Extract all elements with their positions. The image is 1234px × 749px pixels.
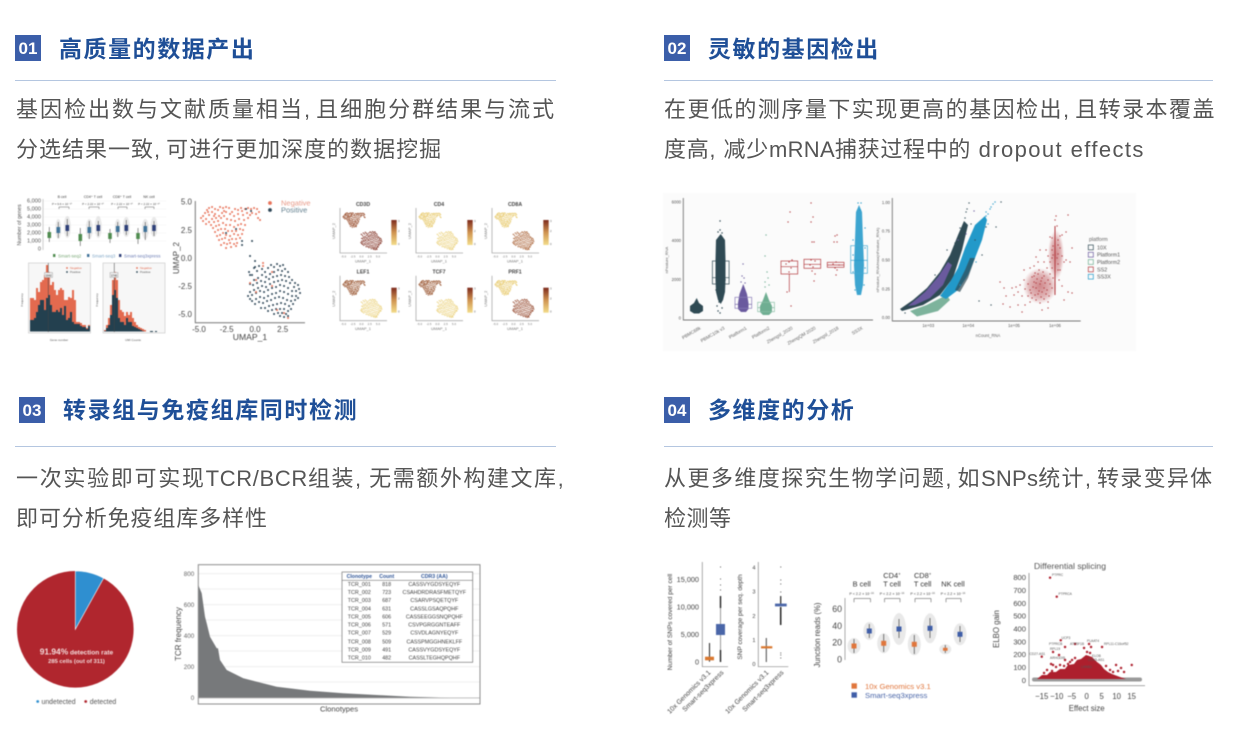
volcano plot: differential splicing: PTPRCB — [1049, 642, 1063, 646]
feature plot: CD8A: UMAP_1 — [507, 258, 524, 264]
chart group 02 — [664, 197, 1121, 346]
clonotype table: CSVPGRGGNTEAFF — [408, 623, 461, 629]
divider 01 — [15, 80, 556, 81]
clonotype table: TCR_010 — [348, 655, 371, 661]
histogram: UMI counts — [95, 263, 165, 342]
volcano plot: differential splicing: ARHGDIB — [1050, 656, 1066, 660]
pie chart: detection rate: 285 cells (out of 311) — [48, 659, 105, 665]
scatter plot: nCount vs nFeature: 0.25 — [882, 286, 891, 292]
feature plot: CD8A: -5.0 -2.5 0.0 2.5 5.0 — [493, 254, 532, 258]
box and strip plot: nFeature by dataset: nFeature_RNA — [664, 246, 669, 273]
box plot: number of genes: 5,000 — [27, 207, 41, 213]
scatter plot: nCount vs nFeature: 1e+04 — [962, 323, 975, 328]
feature plot: LEF1: UMAP_2 — [331, 290, 336, 307]
clonotype table: TCR_004 — [348, 606, 371, 612]
volcano plot: differential splicing: 0 — [1022, 676, 1026, 685]
clonotype table: 687 — [382, 598, 391, 604]
volcano plot: differential splicing — [992, 561, 1145, 713]
feature plot: LEF1: UMAP_1 — [355, 326, 372, 331]
badge 04: 04 — [668, 401, 686, 420]
box plot: SNP coverage per depth: 2 — [752, 614, 756, 620]
UMAP scatter: negative and positive — [172, 198, 311, 342]
dot plot: junction reads: P < 2.2 × 10⁻¹⁶ — [880, 592, 905, 596]
histogram: gene number: Gene number — [50, 338, 68, 342]
feature plot: TCF7 — [407, 270, 476, 331]
clonotype table: CASSVYGDSYEQYF — [408, 647, 461, 653]
bar chart: TCR frequency by clonotype: 400 — [184, 633, 195, 640]
box plot: number of genes: Number of genes — [17, 204, 23, 246]
scatter plot: nCount vs nFeature: 0.50 — [882, 258, 891, 262]
text block 02: 在更低的测序量下实现更高的基因检出,且转录本覆盖 — [664, 97, 1216, 122]
feature plot: PRF1: PRF1 — [508, 270, 522, 276]
box plot: SNPs per cell: 10x Genomics v3.1 — [666, 669, 713, 716]
clonotype table: TCR_002 — [348, 590, 371, 596]
histogram: UMI counts: Frequency — [95, 293, 99, 307]
histogram: gene number: Frequency — [20, 293, 24, 307]
volcano plot: differential splicing: RPL19 — [1050, 647, 1060, 651]
volcano plot: differential splicing: 5 — [1100, 692, 1105, 701]
text block 03: 一次实验即可实现TCR/BCR组装,无需额外构建文库, — [16, 466, 565, 491]
dot plot: junction reads: Junction reads (%) — [813, 602, 822, 668]
box and strip plot: nFeature by dataset: SS3X — [851, 326, 864, 336]
pie chart: detection rate: detected — [90, 699, 116, 706]
box and strip plot: nFeature by dataset: Zhengsl_2018 — [812, 325, 840, 344]
UMAP scatter: negative and positive: Negative — [281, 199, 311, 208]
volcano plot: differential splicing: 300 — [1013, 638, 1026, 646]
text block 01: 基因检出数与文献质量相当,且细胞分群结果与流式 — [16, 97, 556, 122]
box and strip plot: nFeature by dataset: PBMC10k v3 — [700, 325, 726, 343]
box and strip plot: nFeature by dataset: 6000 — [672, 200, 682, 204]
feature plot: PRF1 — [483, 270, 552, 331]
box and strip plot: nFeature by dataset: Platform1 — [728, 325, 748, 340]
box and strip plot: nFeature by dataset: 2000 — [672, 277, 682, 282]
bar chart: TCR frequency by clonotype: TCR frequency — [174, 607, 183, 661]
UMAP scatter: negative and positive: 0.0 — [249, 325, 261, 334]
chart group 03 — [16, 564, 482, 714]
box plot: number of genes: 1,000 — [27, 238, 41, 244]
UMAP scatter: negative and positive: -2.5 — [220, 325, 234, 334]
clonotype table: CASSLGSAQPQHF — [410, 606, 459, 612]
feature plot: CD8A: CD8A — [508, 202, 522, 208]
histogram: UMI counts: UMI Counts — [125, 338, 141, 342]
clonotype table: 818 — [382, 582, 391, 588]
scatter plot: nCount vs nFeature: nCount_RNA — [976, 333, 1001, 338]
dot plot: junction reads: Smart-seq3xpress — [865, 691, 928, 700]
dot plot: junction reads: P < 2.2 × 10⁻¹⁶ — [910, 592, 936, 596]
volcano plot: differential splicing: 600 — [1013, 599, 1026, 608]
feature plot: CD4: 0 — [474, 242, 476, 246]
box and strip plot: nFeature by dataset: Platform2 — [751, 325, 771, 340]
box plot: number of genes: Smart-seq2 — [58, 254, 82, 258]
dot plot: junction reads: + — [898, 572, 901, 576]
text block 04 — [664, 466, 1213, 531]
histogram: gene number: Negative — [70, 266, 82, 270]
volcano plot: differential splicing: RPL11-C16orf52 — [1104, 642, 1129, 646]
UMAP scatter: negative and positive: 2.5 — [277, 325, 289, 334]
feature plot: PRF1: -5.0 -2.5 0.0 2.5 5.0 — [493, 322, 532, 326]
text block 04: 检测等 — [664, 506, 732, 531]
feature plot: LEF1: 3 — [398, 287, 400, 291]
box plot: SNPs per cell — [666, 562, 728, 716]
box plot: number of genes: P < 2.22 × 10⁻¹⁶ — [82, 202, 105, 206]
volcano plot: differential splicing: 0 — [1085, 692, 1090, 701]
divider 02 — [664, 80, 1213, 81]
clonotype table: 631 — [382, 606, 391, 612]
clonotype table: CSAHDRDRASFMETQYF — [403, 590, 467, 596]
box and strip plot: nFeature by dataset: PBMC68k — [681, 325, 702, 340]
feature plot: CD4: CD4 — [434, 202, 444, 208]
box plot: number of genes: CD4⁺ T cell — [84, 195, 102, 199]
box plot: SNPs per cell: 15,000 — [677, 575, 699, 584]
feature plot: CD3D — [331, 202, 400, 264]
box plot: SNP coverage per depth: Smart-seq3xpress — [741, 669, 786, 713]
UMAP scatter: negative and positive: Positive — [281, 206, 307, 215]
feature plot: CD4: 2 — [474, 229, 476, 233]
dot plot: junction reads: 10x Genomics v3.1 — [865, 682, 931, 691]
panel: sensitive gene detection — [664, 35, 1216, 346]
dot plot: junction reads: + — [929, 572, 932, 576]
dot plot: junction reads: T cell — [883, 580, 901, 588]
feature plot: PRF1: UMAP_2 — [483, 290, 488, 307]
bar chart: TCR frequency by clonotype: 600 — [184, 602, 195, 609]
feature plot: CD3D: CD3D — [356, 202, 370, 208]
clonotype table: TCR_007 — [348, 631, 371, 637]
chart group 04 — [666, 561, 1146, 716]
clonotype table: Clonotype — [347, 574, 372, 580]
box plot: SNPs per cell: 0 — [695, 657, 699, 666]
feature plot: CD3D: 3 — [398, 219, 400, 223]
box plot: number of genes — [17, 195, 166, 258]
clonotype table: CSARVPSQETQYF — [410, 598, 459, 604]
bar chart: TCR frequency by clonotype — [174, 565, 480, 714]
histogram: gene number: 1942 — [45, 273, 52, 277]
volcano plot: differential splicing: 700 — [1013, 586, 1026, 595]
text block 04: 从更多维度探究生物学问题,如SNPs统计,转录变异体 — [664, 466, 1213, 491]
box plot: number of genes: 3,000 — [27, 222, 41, 228]
UMAP scatter: negative and positive: -5.0 — [178, 310, 193, 319]
clonotype table: TCR_008 — [348, 639, 371, 645]
volcano plot: differential splicing: −15 — [1035, 692, 1049, 701]
scatter plot: nCount vs nFeature — [875, 198, 1120, 338]
box plot: SNP coverage per depth: 0 — [752, 662, 756, 668]
clonotype table: CASSEEGGSNQPQHF — [406, 614, 463, 620]
volcano plot: differential splicing: ELBO gain — [992, 610, 1001, 648]
bar chart: TCR frequency by clonotype: 800 — [184, 571, 195, 578]
badge 01 — [15, 35, 41, 61]
badge 02 — [664, 35, 690, 61]
panel: high quality data — [15, 35, 556, 342]
scatter plot: nCount vs nFeature: 10X — [1097, 245, 1107, 251]
feature plot: TCF7: 3 — [474, 287, 476, 291]
UMAP scatter: negative and positive: 5.0 — [181, 198, 193, 206]
scatter plot: nCount vs nFeature: SS3X — [1097, 275, 1111, 281]
box and strip plot: nFeature by dataset: Zhengsl_2020 — [766, 325, 794, 344]
box plot: number of genes: P < 2.22 × 10⁻¹⁶ — [138, 202, 161, 206]
bar chart: TCR frequency by clonotype: Clonotypes — [320, 704, 358, 714]
dot plot: junction reads — [813, 571, 966, 700]
box and strip plot: nFeature by dataset: 0 — [679, 316, 682, 320]
clonotype table: TCR_006 — [348, 623, 371, 629]
feature plot: TCF7: UMAP_1 — [431, 326, 448, 331]
feature plot: PRF1: 2 — [550, 297, 552, 301]
feature plot: LEF1: LEF1 — [357, 270, 369, 276]
badge 04 — [664, 397, 690, 423]
volcano plot: differential splicing: 10 — [1112, 692, 1122, 701]
UMAP scatter: negative and positive: 0.0 — [181, 254, 193, 263]
box plot: SNPs per cell: 5,000 — [681, 630, 699, 639]
heading 04: 多维度的分析 — [708, 397, 855, 423]
UMAP scatter: negative and positive: -5.0 — [192, 325, 206, 334]
clonotype table: 529 — [382, 631, 391, 637]
histogram: UMI counts: Positive — [140, 270, 151, 274]
box plot: SNP coverage per depth: SNP coverage per seq. depth — [737, 574, 744, 660]
feature plot: TCF7: -5.0 -2.5 0.0 2.5 5.0 — [417, 322, 456, 326]
panel: transcriptome and immune repertoire — [15, 397, 565, 714]
volcano plot: differential splicing: PTPRCA — [1058, 592, 1073, 596]
histogram: gene number — [20, 263, 90, 342]
box and strip plot: nFeature by dataset: ZhengQM 2020 — [786, 325, 817, 346]
box plot: number of genes: 4,000 — [27, 214, 41, 220]
feature plot: LEF1: 2 — [398, 297, 400, 301]
clonotype table: CASSLTEGHQPQHF — [409, 655, 461, 661]
clonotype table: CSVDLAGNYEQYF — [410, 631, 459, 637]
clonotype table: CASSPMGGHNEKLFF — [406, 639, 463, 645]
feature plot: PRF1: UMAP_1 — [507, 326, 524, 331]
dot plot: junction reads: NK cell — [941, 580, 965, 588]
clonotype table: CDR3 (AA) — [421, 574, 448, 580]
box plot: number of genes: Smart-seq3xpress — [124, 254, 161, 258]
panel: multidimensional analysis — [664, 397, 1213, 716]
divider 03 — [15, 446, 556, 447]
feature plot: CD8A: 2 — [550, 229, 552, 233]
box and strip plot: nFeature by dataset — [664, 198, 873, 346]
badge 03: 03 — [23, 401, 41, 420]
feature plot: LEF1: 0 — [398, 310, 400, 314]
box plot: SNP coverage per depth — [724, 562, 788, 716]
feature plot: CD4 — [407, 202, 476, 264]
box plot: number of genes: Smart-seq3 — [92, 254, 116, 258]
dot plot: junction reads: 40 — [832, 621, 842, 631]
histogram: UMI counts: 1740 — [111, 273, 118, 277]
box plot: number of genes: 2,000 — [27, 230, 41, 236]
clonotype table: 723 — [382, 590, 391, 596]
volcano plot: differential splicing: −10 — [1050, 692, 1064, 701]
UMAP scatter: negative and positive: UMAP_1 — [233, 332, 267, 342]
scatter plot: nCount vs nFeature: 1e+06 — [1049, 323, 1062, 328]
dot plot: junction reads: 20 — [832, 638, 842, 648]
volcano plot: differential splicing: −5 — [1067, 692, 1077, 701]
volcano plot: differential splicing: 200 — [1013, 650, 1026, 659]
histogram: gene number: Positive — [70, 270, 81, 274]
box plot: SNP coverage per depth: 1 — [752, 638, 756, 644]
feature plot: TCF7: UMAP_2 — [407, 290, 412, 307]
feature plot: CD8A: 3 — [550, 219, 552, 223]
feature plot: PRF1: 3 — [550, 287, 552, 291]
clonotype table: CASSVYGDSYEQYF — [408, 582, 461, 588]
clonotype table: 491 — [382, 647, 391, 653]
dot plot: junction reads: CD8 — [914, 571, 929, 580]
text block 01 — [16, 97, 556, 162]
box plot: number of genes: P < 2.22 × 10⁻¹⁶ — [111, 202, 134, 206]
clonotype table: TCR_005 — [348, 614, 371, 620]
scatter plot: nCount vs nFeature: SS2 — [1097, 267, 1107, 273]
feature plot: CD8A: 0 — [550, 242, 552, 246]
dot plot: junction reads: 60 — [832, 604, 842, 614]
feature plot: CD8A — [483, 202, 552, 264]
volcano plot: differential splicing: Differential splicing — [1034, 561, 1106, 571]
scatter plot: nCount vs nFeature: platform — [1089, 237, 1108, 243]
clonotype table: 606 — [382, 614, 391, 620]
volcano plot: differential splicing: 800 — [1013, 573, 1026, 582]
histogram: UMI counts: Negative — [140, 266, 152, 270]
box plot: SNPs per cell: 10,000 — [677, 602, 699, 612]
badge 03 — [19, 397, 45, 423]
badge 02: 02 — [668, 39, 686, 58]
feature plot: CD4: UMAP_2 — [407, 222, 412, 239]
dot plot: junction reads: 0 — [837, 655, 842, 665]
feature plot: CD4: -5.0 -2.5 0.0 2.5 5.0 — [417, 254, 456, 258]
box plot: SNP coverage per depth: 10x Genomics v3.1 — [724, 669, 771, 716]
UMAP scatter: negative and positive: UMAP_2 — [172, 241, 181, 274]
feature plot: CD4: 3 — [474, 219, 476, 223]
pie chart: detection rate: 91.94% detection rate — [40, 646, 114, 656]
clonotype table: TCR_001 — [348, 582, 371, 588]
feature plot: LEF1: -5.0 -2.5 0.0 2.5 5.0 — [341, 322, 380, 326]
clonotype table: 509 — [382, 639, 391, 645]
text block 01: 分选结果一致,可进行更加深度的数据挖掘 — [16, 137, 442, 162]
dot plot: junction reads: CD4 — [883, 571, 898, 580]
pie chart: detection rate — [17, 571, 134, 706]
volcano plot: differential splicing: 100 — [1013, 663, 1026, 672]
box plot: number of genes: NK cell — [143, 195, 155, 199]
volcano plot: differential splicing: UCP3 — [1062, 636, 1070, 640]
text block 03 — [16, 466, 565, 531]
badge 01: 01 — [19, 39, 37, 58]
box and strip plot: nFeature by dataset: 4000 — [672, 238, 682, 243]
box plot: SNP coverage per depth: 3 — [752, 590, 756, 596]
bar chart: TCR frequency by clonotype: 200 — [184, 664, 195, 671]
box plot: SNP coverage per depth: 4 — [752, 566, 756, 572]
heading 01: 高质量的数据产出 — [59, 36, 255, 62]
scatter plot: nCount vs nFeature: 1.00 — [882, 200, 891, 205]
volcano plot: differential splicing: 500 — [1013, 612, 1026, 620]
feature plot: CD4: UMAP_1 — [431, 258, 448, 264]
pie chart: detection rate: undetected — [42, 699, 76, 706]
scatter plot: nCount vs nFeature: 0.00 — [882, 315, 891, 320]
scatter plot: nCount vs nFeature: 1e+03 — [922, 323, 935, 328]
bar chart: TCR frequency by clonotype: 0 — [191, 695, 195, 702]
clonotype table: TCR_009 — [348, 647, 371, 653]
feature plot: CD8A: UMAP_2 — [483, 222, 488, 239]
feature plot: CD3D: UMAP_1 — [355, 258, 372, 264]
volcano plot: differential splicing: LMNB1 — [1081, 665, 1092, 669]
volcano plot: differential splicing: Effect size — [1069, 704, 1105, 713]
text block 02 — [664, 97, 1216, 162]
clonotype table: TCR_003 — [348, 598, 371, 604]
scatter plot: nCount vs nFeature: nFeature_RNA/max(nFeature_RNA) — [875, 227, 880, 292]
box plot: number of genes: P = 9.6 × 10⁻¹⁶ — [52, 202, 73, 206]
feature plot: CD3D: 0 — [398, 242, 400, 246]
text block 02: 度高,减少mRNA捕获过程中的 dropout effects — [664, 137, 1145, 162]
box plot: number of genes: B cell — [58, 195, 67, 199]
volcano plot: differential splicing: 400 — [1013, 624, 1026, 634]
box plot: SNPs per cell: Number of SNPs covered per cell — [667, 573, 674, 670]
UMAP scatter: negative and positive: -2.5 — [178, 282, 193, 291]
box plot: SNPs per cell: Smart-seq3xpress — [681, 669, 726, 713]
dot plot: junction reads: B cell — [853, 580, 871, 588]
feature plot: TCF7: 0 — [474, 310, 476, 314]
feature plot: TCF7: 2 — [474, 297, 476, 301]
dot plot: junction reads: P < 2.2 × 10⁻¹⁶ — [849, 592, 875, 596]
scatter plot: nCount vs nFeature: Platform1 — [1097, 253, 1120, 259]
box plot: number of genes: 0 — [38, 246, 41, 252]
volcano plot: differential splicing: 15 — [1127, 692, 1137, 701]
feature plot: LEF1 — [331, 270, 400, 331]
volcano plot: differential splicing: ELOB — [1092, 654, 1102, 658]
volcano plot: differential splicing: ATP5F1B — [1070, 642, 1085, 646]
clonotype table: 482 — [382, 655, 391, 661]
scatter plot: nCount vs nFeature: 1e+05 — [1008, 323, 1021, 328]
scatter plot: nCount vs nFeature: 0.75 — [882, 228, 891, 234]
clonotype table: Count — [379, 574, 394, 580]
scatter plot: nCount vs nFeature: Platform2 — [1097, 260, 1120, 266]
feature plot: CD3D: 2 — [398, 229, 400, 233]
feature plot: CD3D: UMAP_2 — [331, 222, 336, 239]
clonotype table: 571 — [382, 623, 391, 629]
feature plot: TCF7: TCF7 — [433, 270, 446, 276]
dot plot: junction reads: P < 2.2 × 10⁻¹⁶ — [941, 592, 966, 596]
dot plot: junction reads: T cell — [914, 580, 932, 588]
feature plot: CD3D: -5.0 -2.5 0.0 2.5 5.0 — [341, 254, 380, 258]
heading 02: 灵敏的基因检出 — [708, 36, 880, 62]
divider 04 — [664, 446, 1213, 447]
volcano plot: differential splicing: COX5-AS1 — [1088, 658, 1104, 662]
text block 03: 即可分析免疫组库多样性 — [16, 506, 268, 531]
volcano plot: differential splicing: PLAAT4 — [1087, 639, 1099, 643]
chart group 01 — [16, 194, 552, 342]
volcano plot: differential splicing: PTPRC — [1052, 573, 1064, 577]
clonotype table — [342, 572, 473, 662]
box plot: number of genes: CD8⁺ T cell — [113, 195, 131, 199]
volcano plot: differential splicing: CD27-AS1 — [1030, 652, 1045, 656]
feature plot: PRF1: 0 — [550, 310, 552, 314]
box plot: number of genes: 6,000 — [27, 199, 41, 205]
heading 03: 转录组与免疫组库同时检测 — [63, 397, 358, 423]
UMAP scatter: negative and positive: 2.5 — [181, 226, 193, 235]
